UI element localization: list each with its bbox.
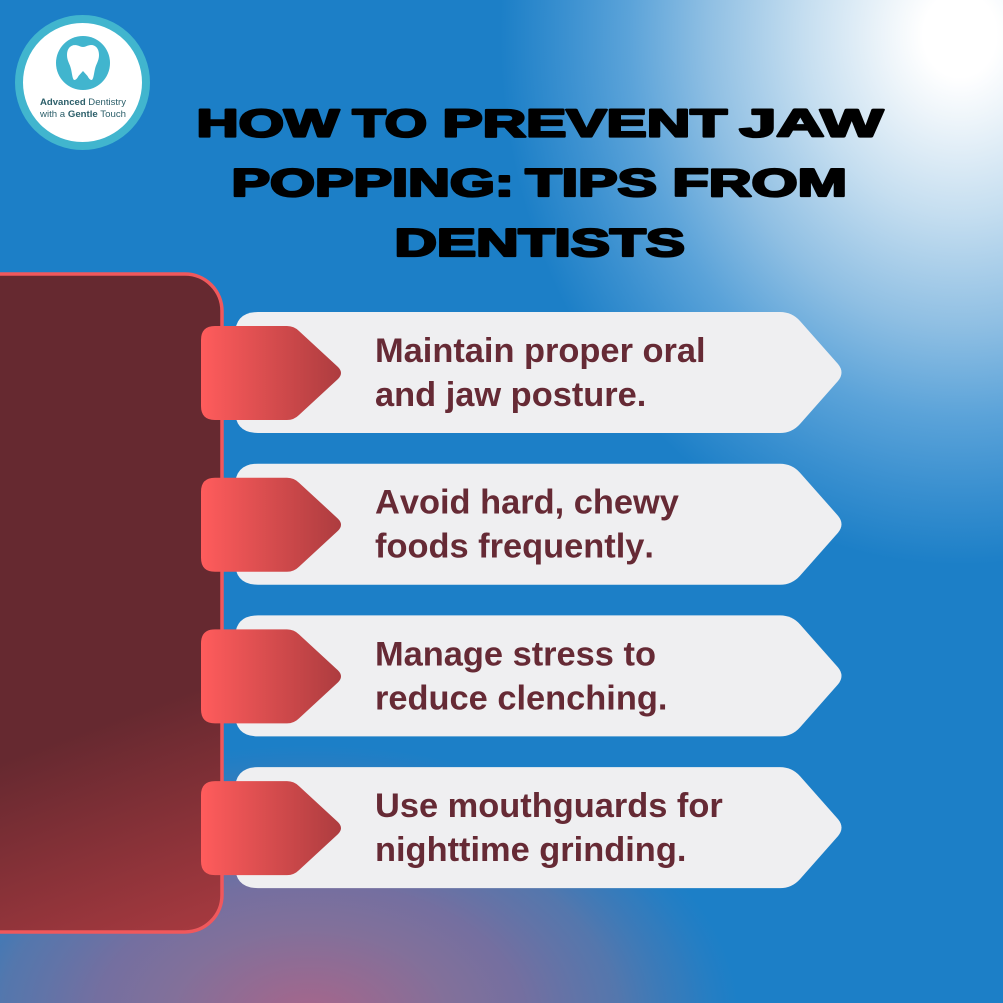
- title: JAW: [740, 102, 884, 146]
- title: POPPING:: [232, 162, 514, 205]
- tip text: Maintain proper oral: [375, 332, 706, 370]
- tip text: and jaw posture.: [375, 376, 646, 414]
- arrow tag: [201, 629, 341, 723]
- tip text: Use mouthguards for: [375, 787, 723, 825]
- card shape: [235, 312, 842, 433]
- tip text: foods frequently.: [375, 528, 654, 566]
- card 4: [201, 767, 842, 888]
- card shape: [235, 615, 842, 736]
- title: FROM: [672, 162, 847, 205]
- title: TIPS: [526, 162, 657, 205]
- arrow tag: [201, 326, 341, 420]
- tip text: nighttime grinding.: [375, 831, 686, 869]
- tip text: reduce clenching.: [375, 679, 667, 717]
- card 3: [201, 615, 842, 736]
- arrow tag: [201, 781, 341, 875]
- tip text: Avoid hard, chewy: [375, 484, 679, 522]
- card shape: [235, 464, 842, 585]
- tip text: Manage stress to: [375, 635, 656, 673]
- title: DENTISTS: [394, 222, 685, 265]
- arrow tag: [201, 478, 341, 572]
- card 1: [201, 312, 842, 433]
- title: [196, 102, 884, 265]
- logo badge: [19, 19, 146, 146]
- logo text: Advanced Dentistry: [40, 97, 126, 108]
- title: TO: [352, 102, 427, 146]
- card shape: [235, 767, 842, 888]
- icon: tooth: [56, 36, 110, 90]
- card 2: [201, 464, 842, 585]
- logo badge: with a Gentle Touch: [39, 109, 126, 120]
- panel: dark red side panel: [0, 274, 222, 932]
- title: PREVENT: [442, 102, 728, 146]
- title: HOW: [196, 102, 340, 146]
- logo ring: [19, 19, 146, 146]
